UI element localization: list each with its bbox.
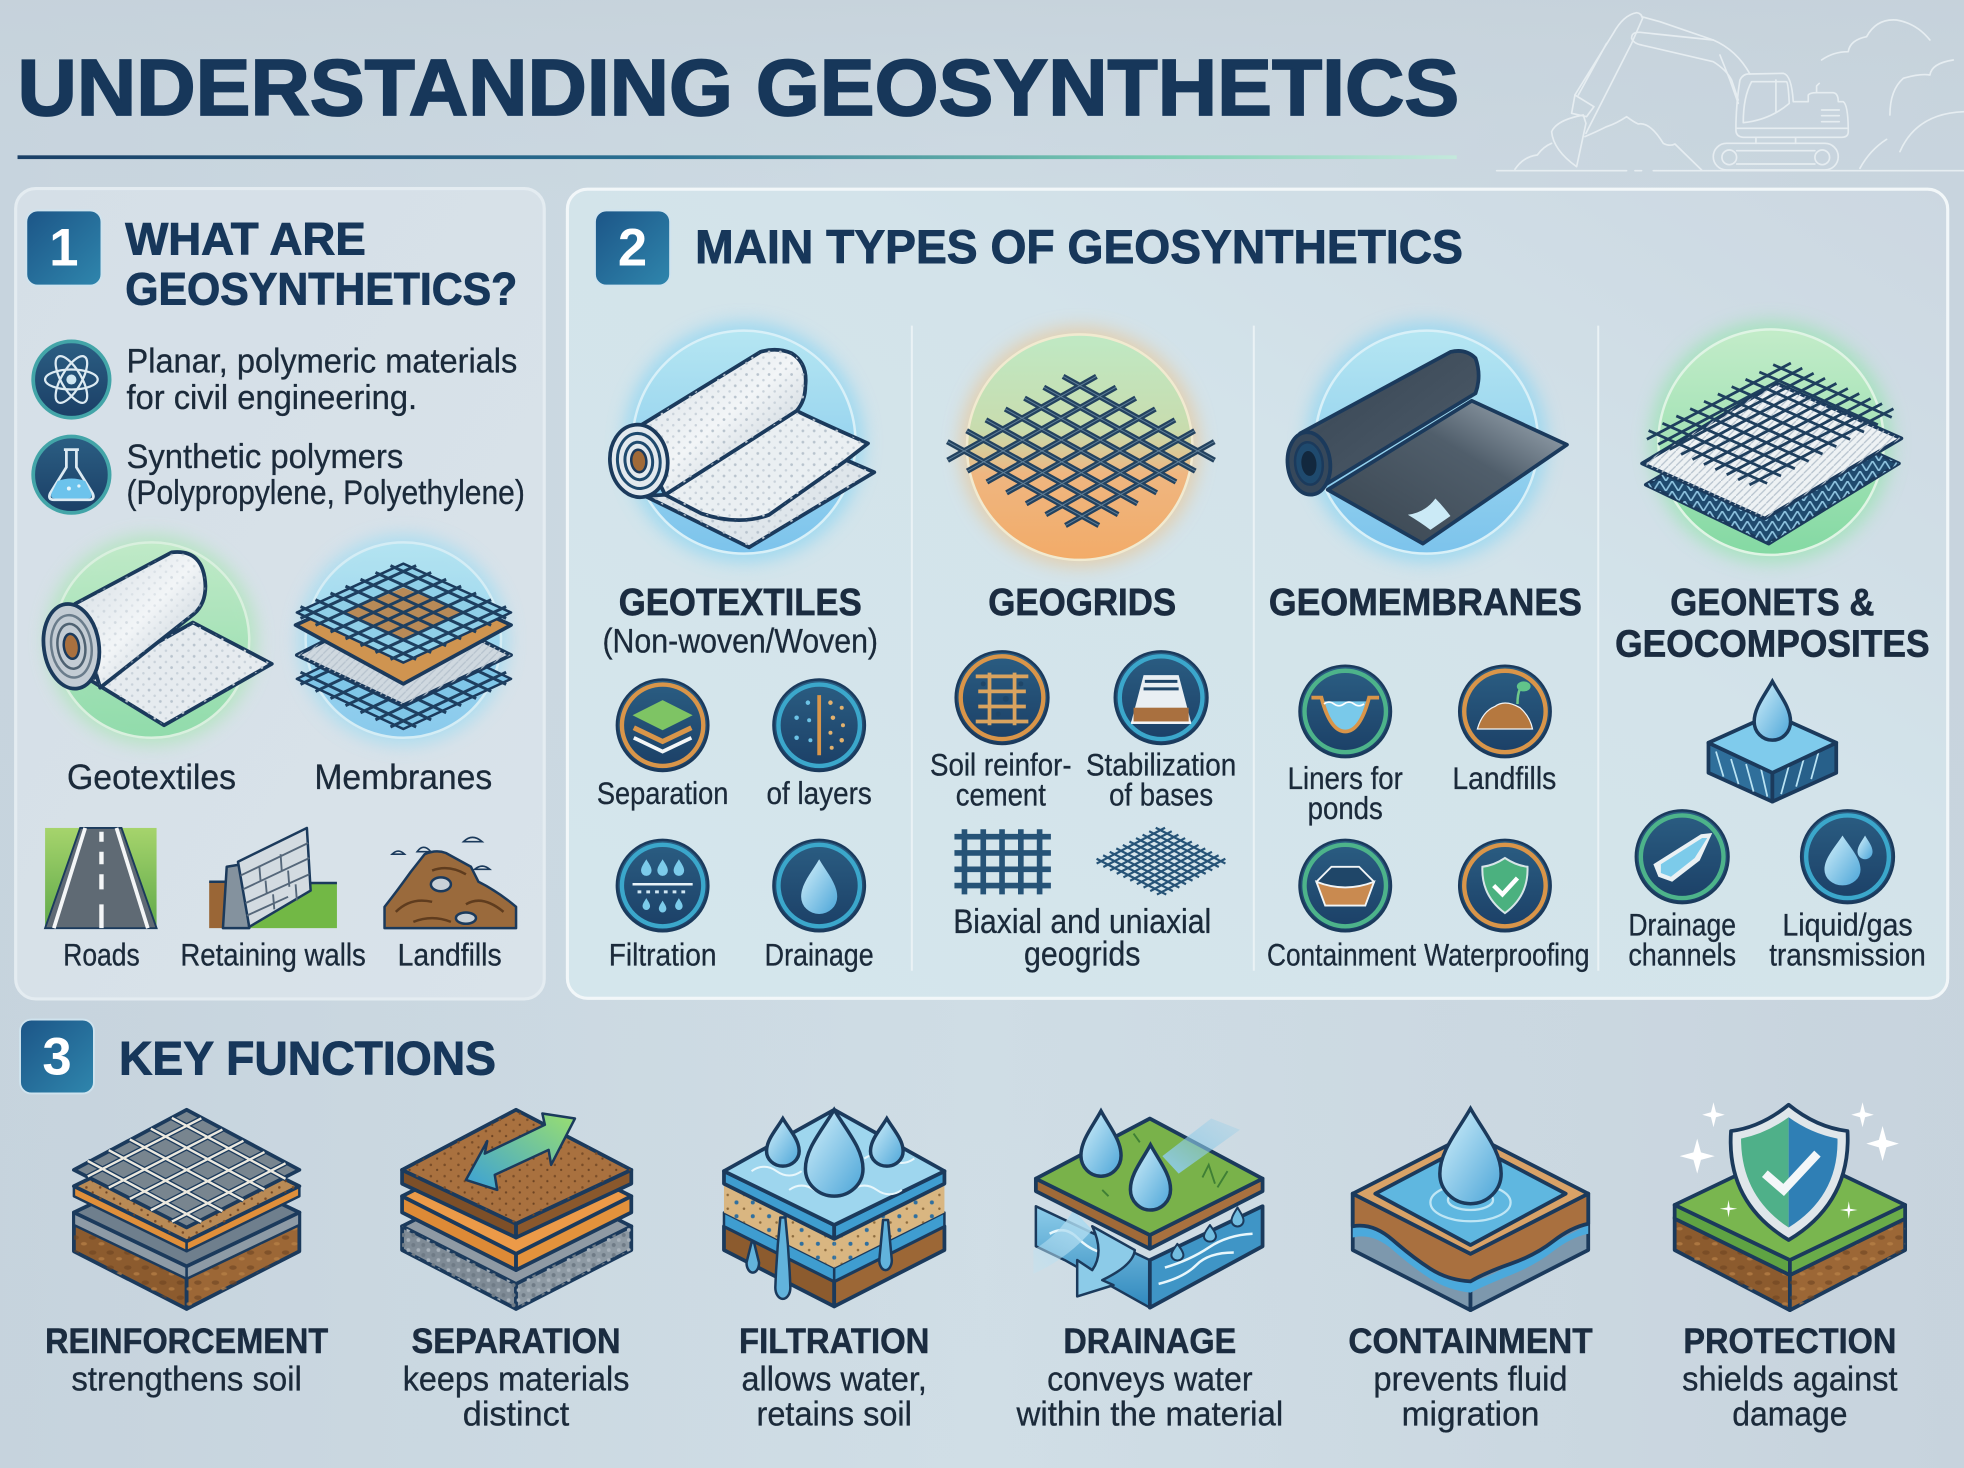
label: containment: CONTAINMENT — [1348, 1322, 1593, 1361]
column: geotextiles — [597, 322, 878, 973]
label: stabilization of bases: Stabilization — [1086, 747, 1236, 782]
heading: main types: MAIN TYPES OF GEOSYNTHETICS — [695, 221, 1463, 274]
label: containment — [1348, 1322, 1593, 1433]
label: drainage: Drainage — [765, 938, 874, 973]
text: synthetic polymers — [127, 438, 525, 512]
label: filtration — [739, 1322, 929, 1433]
label: biaxial and uniaxial geogrids: geogrids — [1024, 936, 1140, 974]
badge 3: 3 — [42, 1028, 72, 1087]
label: filtration: Filtration — [609, 938, 716, 973]
icon: containment basin — [1353, 1109, 1588, 1310]
icon: waterproofing shield — [1459, 840, 1551, 931]
label: containment: Containment — [1267, 938, 1416, 973]
label: protection: PROTECTION — [1683, 1322, 1896, 1361]
label: retaining walls: Retaining walls — [180, 938, 366, 973]
illustration: geomembrane roll — [1284, 322, 1567, 562]
icon: atom — [33, 341, 110, 418]
label: liners for ponds — [1288, 761, 1403, 826]
illustration: geotextile roll — [38, 535, 272, 745]
badge 1 — [26, 210, 101, 286]
icon: landfill — [385, 837, 516, 928]
heading: geotextiles: GEOTEXTILES — [619, 581, 862, 623]
label: membranes: Membranes — [314, 758, 492, 797]
panel: main types of geosynthetics — [567, 189, 1948, 998]
panel 1 background — [16, 189, 544, 999]
icon: soil reinforcement — [956, 651, 1048, 744]
heading: what are geosynthetics: GEOSYNTHETICS? — [125, 263, 517, 314]
panel 2 background — [567, 189, 1948, 998]
label: stabilization of bases — [1086, 747, 1236, 812]
heading: geogrids: GEOGRIDS — [988, 581, 1176, 623]
icon: stabilization of bases — [1115, 651, 1207, 744]
text: planar polymeric materials: Planar, polymeric materials — [127, 343, 517, 381]
label: separation: distinct — [463, 1395, 570, 1433]
label: liquid gas transmission: transmission — [1769, 938, 1926, 973]
label: filtration: allows water, — [742, 1360, 927, 1398]
heading: geonets and geocomposites: GEOCOMPOSITES — [1615, 622, 1930, 664]
label: liquid gas transmission: Liquid/gas — [1782, 908, 1913, 943]
function: filtration — [724, 1110, 944, 1433]
label: drainage channels: Drainage — [1628, 908, 1736, 943]
icon: separation — [617, 680, 708, 771]
label: protection — [1682, 1322, 1898, 1433]
label: drainage: conveys water — [1047, 1360, 1253, 1398]
badge 2 — [595, 210, 670, 286]
illustration: geotextile roll — [606, 322, 874, 562]
label: filtration: FILTRATION — [739, 1322, 929, 1361]
panel: what are geosynthetics — [16, 189, 544, 999]
badge 3 — [20, 1020, 94, 1093]
label: separation: SEPARATION — [411, 1322, 621, 1361]
label: landfills: Landfills — [398, 938, 502, 973]
badge 2: 2 — [618, 219, 647, 278]
label: containment: migration — [1402, 1395, 1539, 1433]
icon: liquid and gas drops — [1801, 810, 1894, 903]
icon: filtration layers — [724, 1110, 944, 1306]
label: separation: keeps materials — [403, 1360, 629, 1398]
icon: filtration — [617, 840, 708, 931]
label: stabilization of bases: of bases — [1109, 777, 1213, 812]
label: biaxial and uniaxial geogrids: Biaxial and uniaxial — [953, 903, 1211, 941]
label: reinforcement: REINFORCEMENT — [45, 1322, 329, 1361]
icon: uniaxial iso grid — [1092, 825, 1230, 897]
label: geotextiles: Geotextiles — [67, 758, 236, 797]
label: landfills: Landfills — [1452, 761, 1556, 796]
label: soil reinforcement — [930, 747, 1072, 812]
label: separation: Separation — [597, 776, 728, 811]
icon: drainage composite block — [1708, 681, 1836, 802]
label: protection: damage — [1732, 1395, 1848, 1433]
icon: separation layers — [402, 1110, 631, 1309]
text: synthetic polymers: (Polypropylene, Polyethylene) — [127, 474, 525, 512]
icon: drainage drop — [773, 840, 865, 931]
heading: what are geosynthetics: WHAT ARE — [125, 213, 366, 264]
label: waterproofing: Waterproofing — [1424, 938, 1589, 973]
label: drainage channels — [1628, 908, 1736, 973]
label: liners for ponds: Liners for — [1288, 761, 1403, 796]
heading: geonets and geocomposites — [1615, 581, 1930, 664]
heading: key functions: KEY FUNCTIONS — [119, 1033, 496, 1086]
icon: road — [45, 828, 157, 928]
illustration: geogrid sheet — [931, 327, 1231, 567]
illustration: geocomposite layers — [1639, 321, 1901, 564]
function: containment — [1348, 1109, 1593, 1433]
label: soil reinforcement: Soil reinfor- — [930, 747, 1072, 782]
icon: pond liner — [1300, 666, 1391, 757]
badge 1: 1 — [49, 219, 79, 278]
icon: reinforcement layers — [73, 1110, 300, 1309]
title: UNDERSTANDING GEOSYNTHETICS — [18, 42, 1459, 132]
label: reinforcement: strengthens soil — [71, 1360, 302, 1398]
label: protection: shields against — [1682, 1360, 1898, 1398]
icon: drainage channels — [1636, 810, 1729, 903]
heading: geonets and geocomposites: GEONETS & — [1670, 581, 1874, 623]
icon: drainage layers — [1033, 1111, 1263, 1308]
label: roads: Roads — [63, 938, 140, 973]
label: drainage: within the material — [1015, 1395, 1283, 1433]
section: key functions — [20, 1020, 1905, 1433]
label: drainage channels: channels — [1628, 938, 1736, 973]
icon: of layers — [773, 680, 865, 771]
label: drainage: DRAINAGE — [1063, 1322, 1236, 1361]
text: planar polymeric materials — [127, 343, 517, 417]
text: planar polymeric materials: for civil engineering. — [127, 379, 417, 417]
function: reinforcement — [45, 1110, 329, 1398]
icon: containment basin — [1300, 840, 1391, 931]
label: of layers: of layers — [767, 776, 872, 811]
column: geogrids — [930, 327, 1236, 974]
column: geomembranes — [1267, 322, 1589, 973]
icon: landfill mound — [1459, 666, 1551, 757]
illustration: membrane layers — [288, 535, 519, 745]
label: reinforcement — [45, 1322, 329, 1398]
decoration: excavator line art — [1497, 13, 1964, 171]
icon: biaxial grid — [954, 829, 1051, 894]
icon: protection shield — [1675, 1102, 1905, 1310]
label: drainage — [1015, 1322, 1283, 1433]
label: biaxial and uniaxial geogrids — [953, 903, 1211, 974]
heading: geomembranes: GEOMEMBRANES — [1269, 581, 1582, 623]
label: soil reinforcement: cement — [956, 777, 1046, 812]
function: drainage — [1015, 1111, 1283, 1433]
label: liners for ponds: ponds — [1308, 791, 1383, 826]
heading: what are geosynthetics — [125, 213, 517, 314]
label: separation — [403, 1322, 629, 1433]
label: containment: prevents fluid — [1373, 1360, 1568, 1398]
function: protection — [1675, 1102, 1905, 1433]
subheading: non-woven/woven: (Non-woven/Woven) — [602, 623, 878, 661]
icon: retaining wall — [209, 828, 337, 928]
column: geonets and geocomposites — [1615, 321, 1930, 973]
icon: flask — [33, 437, 110, 513]
function: separation — [402, 1110, 631, 1433]
text: synthetic polymers: Synthetic polymers — [127, 438, 403, 476]
label: filtration: retains soil — [757, 1395, 912, 1433]
label: liquid gas transmission — [1769, 908, 1926, 973]
